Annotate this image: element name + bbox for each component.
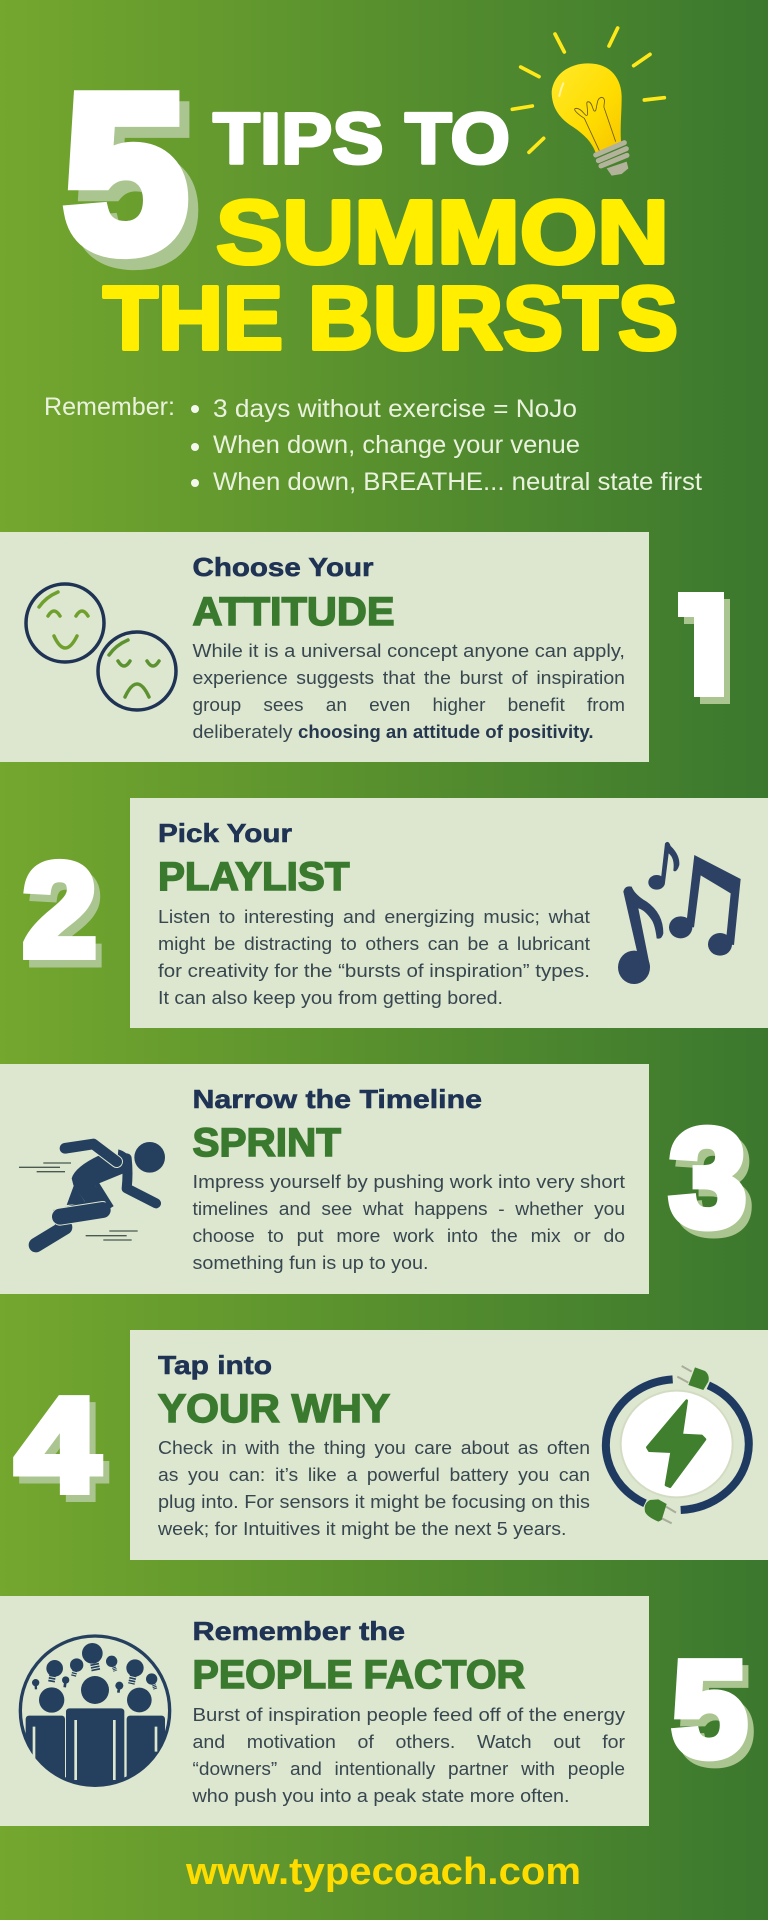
subheading: YOUR WHY [158,1387,390,1431]
heading: Pick Your [158,818,292,848]
body text: Burst of inspiration people feed off of the energy [192,1705,625,1725]
body text: choosing an attitude of positivity. [298,722,594,742]
body text: and motivation of others. Watch out for [192,1732,625,1752]
big number 5: 5 [64,50,187,298]
panel: tip 2 playlist [130,798,768,1028]
title line: TIPS TO: TIPS TO [213,100,510,180]
body text: While it is a universal concept anyone can apply, [192,641,625,661]
body text [191,1705,625,1806]
panel: tip 3 sprint [0,1064,649,1294]
subheading: PLAYLIST [158,855,350,899]
body text [192,1172,625,1273]
body text: for creativity for the “bursts of inspiration” types. [158,961,590,981]
remember list: 3 days without exercise = NoJo [213,395,577,423]
heading: Choose Your [192,552,374,582]
heading: Tap into [158,1350,272,1380]
number 3: 3 [670,1102,746,1256]
body text: Listen to interesting and energizing music; what [158,907,590,927]
title line: THE BURSTS: THE BURSTS [103,269,678,369]
body text: choose to put more work into the mix or do [192,1226,625,1246]
body text: as you can: it’s like a powerful battery you can [158,1465,590,1485]
body text: plug into. For sensors it might be focusing on this [158,1492,590,1512]
icon: happy and sad faces [26,584,176,710]
number 5: 5 [678,1640,753,1792]
heading: Narrow the Timeline [192,1084,482,1114]
number 1: 1 [670,571,745,722]
body text: week; for Intuitives it might be the next 5 years. [157,1519,567,1539]
body text: Check in with the thing you care about as often [158,1438,590,1458]
number 2: 2 [29,844,102,991]
number 4: 4 [22,1378,105,1526]
icon: music notes [618,842,741,984]
panel: tip 5 people factor [0,1596,649,1826]
body text: something fun is up to you. [192,1253,428,1273]
icon: sprinter [19,1142,165,1245]
body text: deliberately [192,722,292,742]
body text: “downers” and intentionally partner with people [192,1759,625,1779]
body text [158,907,590,1008]
remember label: Remember: [44,393,175,421]
body text: timelines and see what happens - whether you [192,1199,625,1219]
icon: people with ideas [20,1636,170,1789]
body text [192,641,625,742]
remember list: When down, BREATHE... neutral state first [213,468,702,496]
remember list: When down, change your venue [213,431,580,459]
subheading: SPRINT [192,1121,341,1165]
icon: energy plug ring [606,1366,749,1523]
body text: Impress yourself by pushing work into very short [192,1172,625,1192]
panel: tip 4 your why [130,1330,768,1560]
body text: who push you into a peak state more often. [191,1786,569,1806]
number 3: 3 [676,1108,752,1262]
remember list [191,395,702,496]
title [64,50,678,369]
icon: light bulb [512,28,664,176]
big number 5: 5 [74,61,197,309]
number 2: 2 [23,836,96,984]
heading: Remember the [192,1616,405,1646]
body text: It can also keep you from getting bored. [158,988,503,1008]
subheading: ATTITUDE [192,590,394,634]
panel: tip 1 attitude [0,532,649,762]
number 5: 5 [672,1634,747,1784]
subheading: PEOPLE FACTOR [192,1653,525,1697]
website link: www.typecoach.com [185,1851,581,1893]
title line: SUMMON: SUMMON [216,183,669,283]
body text: might be distracting to others can be a lubricant [158,934,590,954]
number 4: 4 [16,1372,99,1518]
body text [157,1438,590,1539]
body text: group sees an even higher benefit from [192,695,625,715]
body text: experience suggests that the burst of inspiration [192,668,625,688]
number 1 [678,592,730,704]
